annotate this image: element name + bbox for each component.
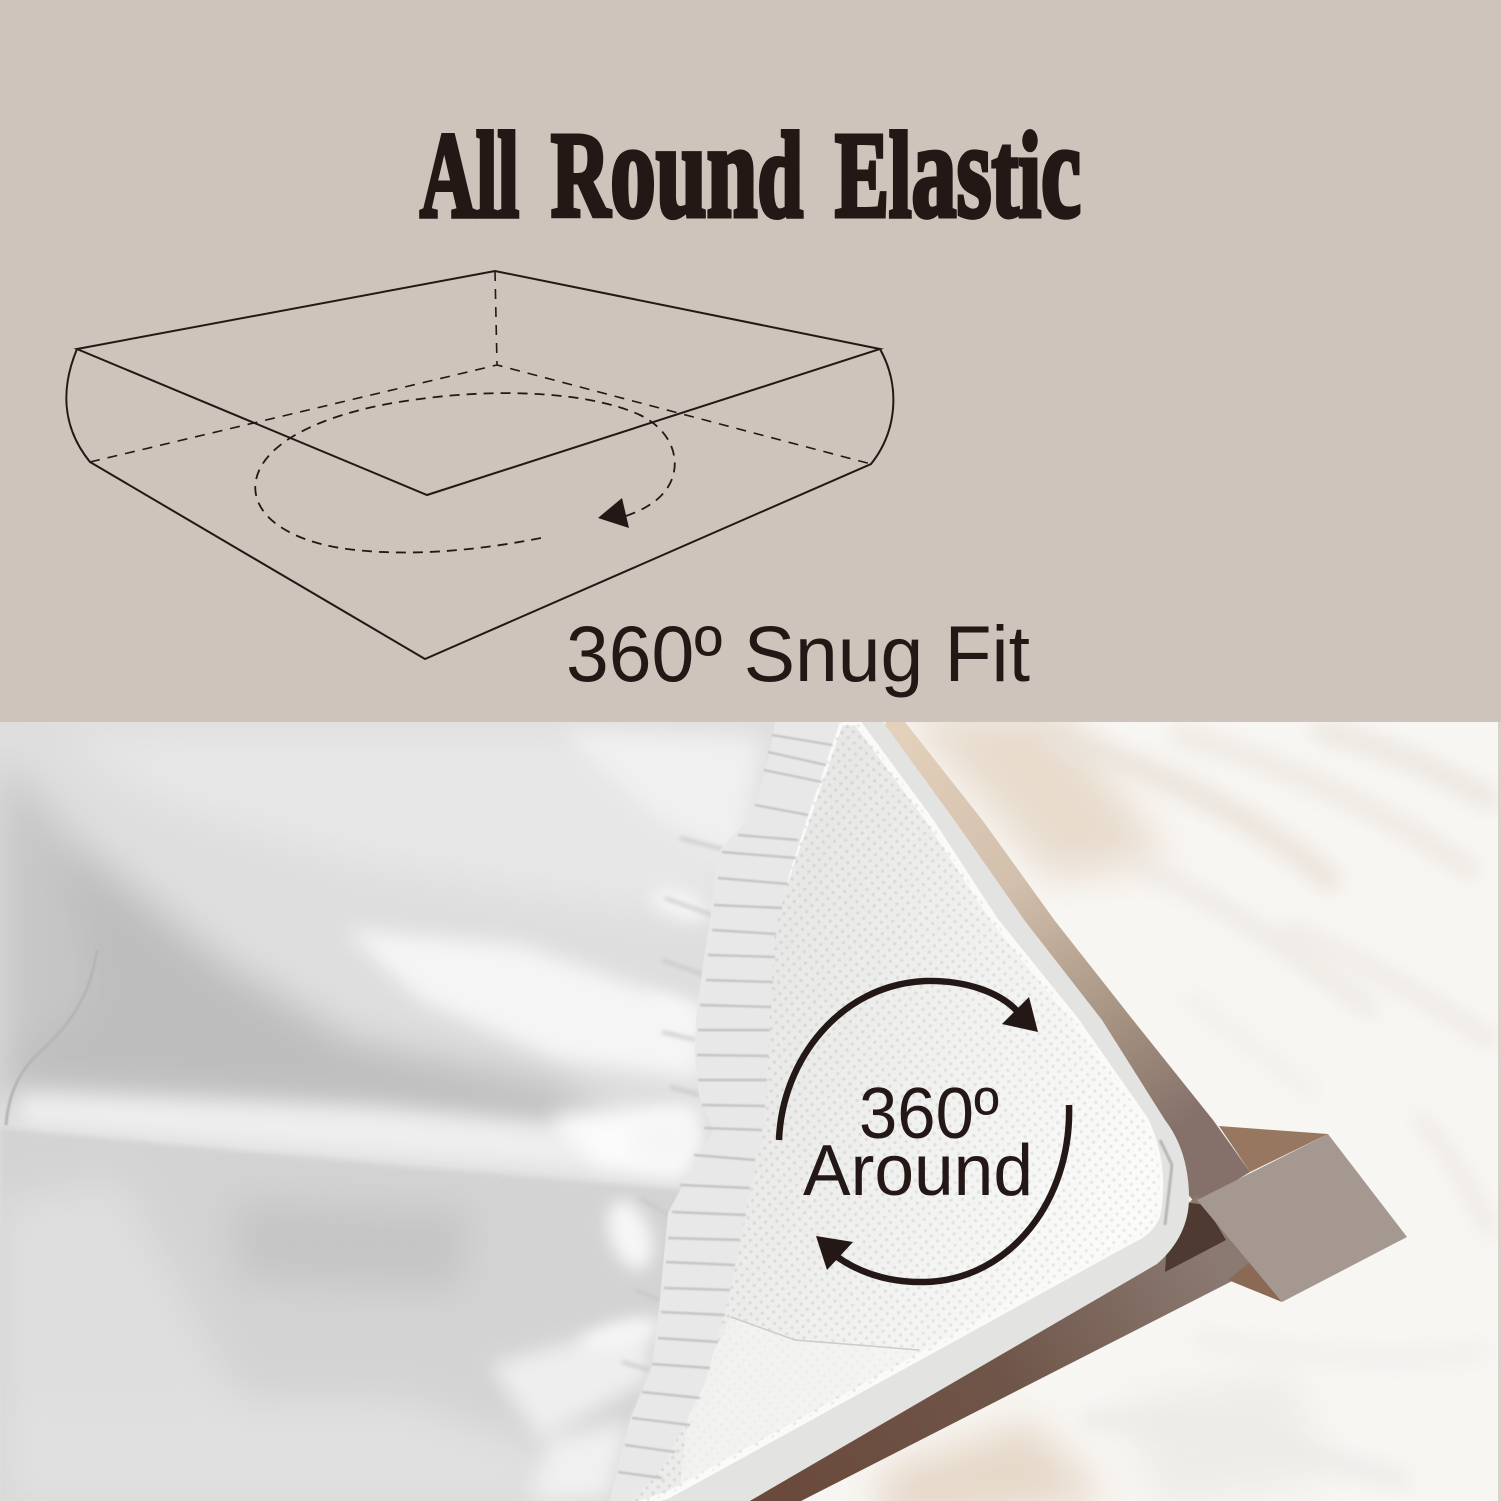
title xyxy=(420,96,1081,246)
mattress xyxy=(632,722,1189,1501)
bed frame post end xyxy=(1197,1126,1407,1302)
title: Elastic xyxy=(835,96,1081,246)
label: 360 around: 360º xyxy=(859,1074,999,1154)
arrow: lower clockwise arc xyxy=(816,1105,1069,1282)
lower sheet panel xyxy=(2,1130,680,1422)
caption: 360 snug fit: 360º Snug Fit xyxy=(566,609,1030,698)
diagram: mattress with elastic direction xyxy=(66,271,893,659)
label: 360 around xyxy=(803,1087,1028,1196)
arrowhead on dashed path xyxy=(598,498,629,528)
floor xyxy=(696,722,1501,1501)
label: 360 around: Around xyxy=(803,1131,1033,1211)
elastic gathered band xyxy=(610,722,840,1501)
gathered ruffle bulges xyxy=(584,892,705,1346)
panel: product photo xyxy=(0,710,1501,1501)
bed frame wood side rail xyxy=(750,722,1250,1501)
sheet folds xyxy=(0,760,710,1124)
title: Round xyxy=(551,96,803,246)
sheet seam xyxy=(6,950,97,1125)
fitted sheet xyxy=(0,722,775,1501)
arrow: upper clockwise arc xyxy=(779,981,1038,1140)
mattress solid outline xyxy=(66,271,893,659)
title: All xyxy=(420,108,519,243)
dashed circular elastic path xyxy=(255,393,675,553)
panel: beige header background xyxy=(0,0,1501,723)
hidden mattress edges xyxy=(90,271,871,464)
